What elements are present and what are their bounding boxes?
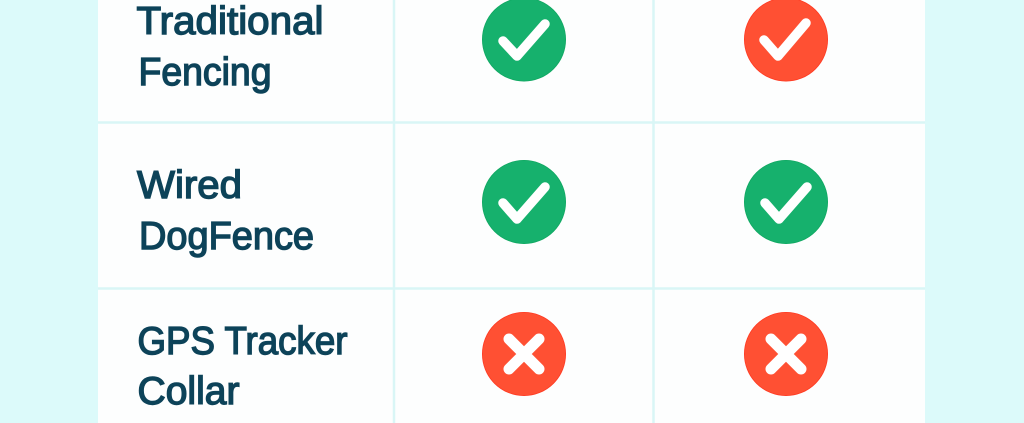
icon: green check [744, 160, 828, 244]
row label: Traditional Fencing [136, 0, 324, 94]
row label: Wired DogFence [137, 164, 314, 258]
icon: red check [744, 0, 828, 81]
icon: green check [482, 0, 566, 81]
icon: red cross [744, 312, 828, 396]
row 1: Traditional Fencing [136, 0, 828, 94]
row label: Traditional Fencing: Fencing [138, 51, 272, 94]
row label: Wired DogFence: Wired [137, 164, 242, 207]
row label: Wired DogFence: DogFence [139, 215, 314, 258]
row label: GPS Tracker Collar: Collar [138, 370, 240, 413]
icon: green check [482, 160, 566, 244]
row 3: GPS Tracker Collar [138, 312, 828, 413]
row 2: Wired DogFence [137, 160, 828, 258]
row label: Traditional Fencing: Traditional [136, 0, 324, 43]
row label: GPS Tracker Collar: GPS Tracker [138, 320, 348, 363]
row label: GPS Tracker Collar [138, 320, 348, 413]
icon: red cross [482, 312, 566, 396]
